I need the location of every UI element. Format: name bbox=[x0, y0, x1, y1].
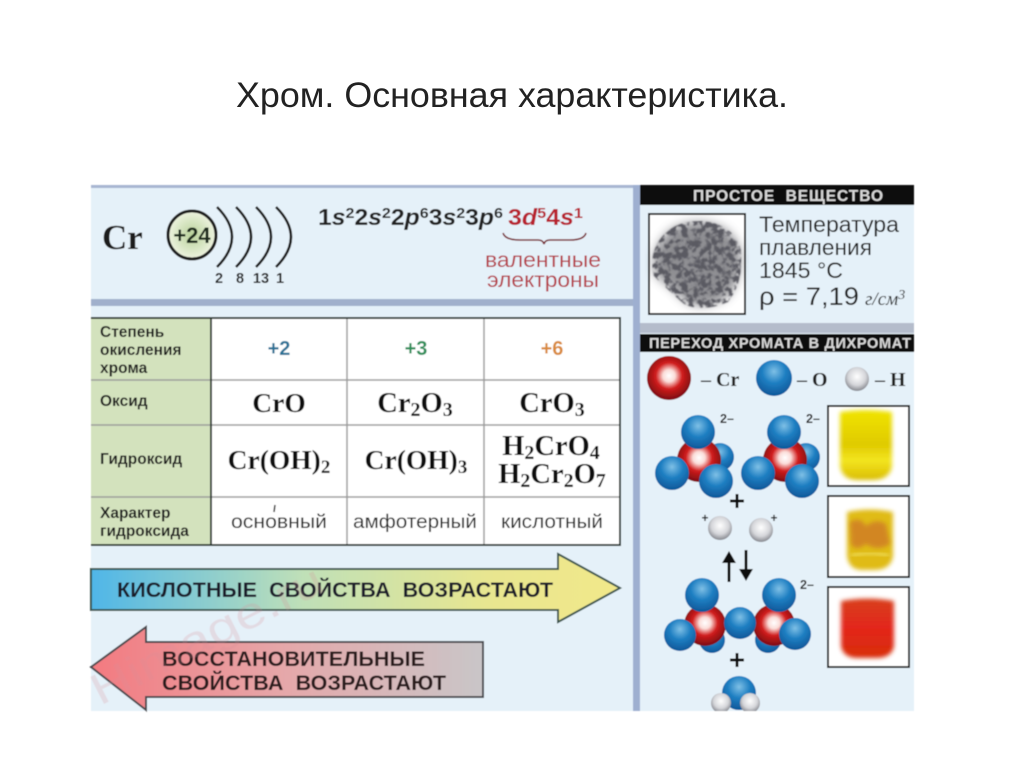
molecule: chromate 1: 2– bbox=[720, 412, 734, 426]
electron formula: 1s bbox=[318, 204, 345, 230]
hydroxides: H bbox=[498, 459, 520, 490]
electron formula: 3 bbox=[465, 204, 479, 230]
hydroxides: 2 bbox=[524, 442, 534, 464]
hydroxides: 4 bbox=[590, 442, 600, 464]
row labels bbox=[100, 324, 189, 540]
valence label: электроны bbox=[487, 269, 599, 292]
molecule: dichromate bbox=[664, 578, 814, 653]
hydroxides: O bbox=[574, 459, 596, 490]
hydroxides: Cr bbox=[530, 459, 564, 490]
molecule: dichromate: 2– bbox=[800, 578, 814, 592]
beaker: orange dichromate bbox=[828, 587, 909, 667]
valence formula: 3d bbox=[508, 204, 536, 230]
molecule: water bbox=[711, 676, 760, 713]
legend bbox=[647, 356, 906, 400]
valence formula: 1 bbox=[574, 205, 583, 222]
row labels: Оксид bbox=[100, 393, 148, 410]
oxides: 3 bbox=[575, 399, 585, 421]
electron formula: 6 bbox=[494, 205, 503, 222]
hydroxides: CrO bbox=[534, 431, 590, 462]
hydroxides: Cr(OH) bbox=[365, 444, 458, 475]
hydrogen ions: + bbox=[770, 511, 778, 525]
beaker: yellow chromate bbox=[828, 406, 909, 486]
atom nucleus: +24 bbox=[173, 223, 211, 248]
oxides: CrO bbox=[252, 387, 306, 418]
hydrogen ions: + bbox=[701, 511, 709, 525]
shell electron counts: 13 bbox=[253, 271, 269, 287]
molecule: chromate 2: 2– bbox=[806, 412, 820, 426]
oxides: O bbox=[421, 388, 443, 419]
plus sign bbox=[730, 653, 744, 667]
electron formula: s bbox=[368, 204, 382, 230]
hydroxides: 3 bbox=[458, 457, 467, 478]
shell electron counts bbox=[215, 271, 284, 287]
hydrogen ions bbox=[701, 511, 778, 542]
arrow: acid properties increase bbox=[91, 554, 620, 622]
electron formula: 3 bbox=[429, 204, 442, 230]
oxidation states: +6 bbox=[541, 338, 563, 360]
atom nucleus bbox=[168, 211, 216, 259]
element symbol: Cr bbox=[102, 218, 143, 257]
equilibrium arrows bbox=[722, 550, 753, 582]
legend: – O bbox=[796, 369, 828, 391]
heading: ПЕРЕХОД ХРОМАТА В ДИХРОМАТ bbox=[649, 336, 911, 352]
watermark: Himage.ru bbox=[82, 555, 332, 715]
hydroxides: Cr(OH) bbox=[228, 444, 321, 475]
electron formula: 2 bbox=[345, 205, 354, 222]
row labels: Гидроксид bbox=[100, 451, 182, 468]
beaker: mixed solution bbox=[828, 496, 909, 577]
arrow: reducing properties increase: СВОЙСТВА ВОЗРАСТАЮТ bbox=[162, 670, 446, 695]
hydroxides: 2 bbox=[564, 470, 574, 492]
hydroxides: 7 bbox=[596, 470, 606, 492]
valence formula: s bbox=[560, 204, 574, 230]
valence label: валентные bbox=[485, 249, 601, 272]
electron formula: 2 bbox=[391, 204, 405, 230]
electron shells bbox=[217, 207, 291, 267]
oxides: 3 bbox=[443, 399, 453, 421]
shell electron counts: 2 bbox=[215, 271, 223, 287]
arrow: reducing properties increase bbox=[91, 627, 483, 710]
molecule: chromate 1 bbox=[655, 412, 734, 498]
row labels: гидроксида bbox=[100, 523, 189, 540]
hydroxides bbox=[228, 431, 606, 492]
oxides: CrO bbox=[519, 388, 575, 419]
row labels: окисления bbox=[100, 342, 182, 359]
electron formula: 2 bbox=[456, 205, 465, 222]
row labels: хрома bbox=[100, 360, 148, 377]
panel: chromate to dichromate bbox=[640, 334, 914, 713]
melting point and density: ρ = 7,19 bbox=[759, 283, 859, 311]
brace bbox=[503, 233, 586, 244]
heading bbox=[640, 185, 914, 205]
panel: simple substance bbox=[640, 185, 914, 314]
shell electron counts: 8 bbox=[236, 271, 244, 287]
melting point and density bbox=[759, 212, 905, 311]
electron formula: p bbox=[404, 204, 420, 230]
heading: ПРОСТОЕ ВЕЩЕСТВО bbox=[693, 188, 883, 205]
legend: – Cr bbox=[700, 369, 739, 391]
chromium photo bbox=[649, 214, 745, 314]
melting point and density: г/см bbox=[865, 289, 898, 310]
panel: electron configuration bbox=[102, 204, 601, 292]
oxides: 2 bbox=[411, 399, 421, 421]
melting point and density: 1845 °C bbox=[759, 258, 843, 283]
legend: – H bbox=[874, 369, 906, 391]
shell electron counts: 1 bbox=[276, 271, 284, 287]
hydroxide character bbox=[231, 505, 603, 533]
oxidation states bbox=[268, 338, 563, 360]
melting point and density: 3 bbox=[897, 288, 905, 303]
melting point and density: Температура bbox=[759, 212, 899, 237]
arrow: reducing properties increase: ВОССТАНОВИТЕЛЬНЫЕ bbox=[162, 647, 425, 671]
melting point and density: плавления bbox=[759, 235, 872, 260]
electron formula: 2 bbox=[382, 205, 391, 222]
electron formula: s bbox=[442, 204, 456, 230]
row labels: Характер bbox=[100, 505, 170, 522]
hydroxides: 2 bbox=[520, 470, 530, 492]
oxides: Cr bbox=[377, 388, 411, 419]
molecule: chromate 2 bbox=[741, 412, 820, 498]
electron formula: 6 bbox=[420, 205, 429, 222]
arrow: acid properties increase: КИСЛОТНЫЕ СВОЙСТВА ВОЗРАСТАЮТ bbox=[117, 577, 553, 602]
hydroxides: H bbox=[502, 431, 524, 462]
title: Хром. Основная характеристика. bbox=[236, 76, 788, 115]
valence label bbox=[485, 249, 601, 292]
panel: chromium infographic bbox=[82, 185, 914, 715]
oxidation states: +3 bbox=[405, 338, 427, 360]
electron formula: 2 bbox=[354, 204, 368, 230]
oxides bbox=[252, 387, 585, 421]
valence formula: 4 bbox=[546, 204, 560, 230]
valence formula: 5 bbox=[537, 205, 546, 222]
hydroxide character: основный bbox=[231, 511, 327, 533]
hydroxide character: кислотный bbox=[501, 511, 603, 533]
electron formula: p bbox=[478, 204, 494, 230]
table: oxidation states bbox=[91, 318, 620, 545]
hydroxides: 2 bbox=[321, 457, 330, 478]
plus sign bbox=[730, 494, 744, 508]
oxidation states: +2 bbox=[268, 338, 290, 360]
hydroxide character: амфотерный bbox=[353, 511, 477, 533]
row labels: Степень bbox=[100, 324, 164, 341]
